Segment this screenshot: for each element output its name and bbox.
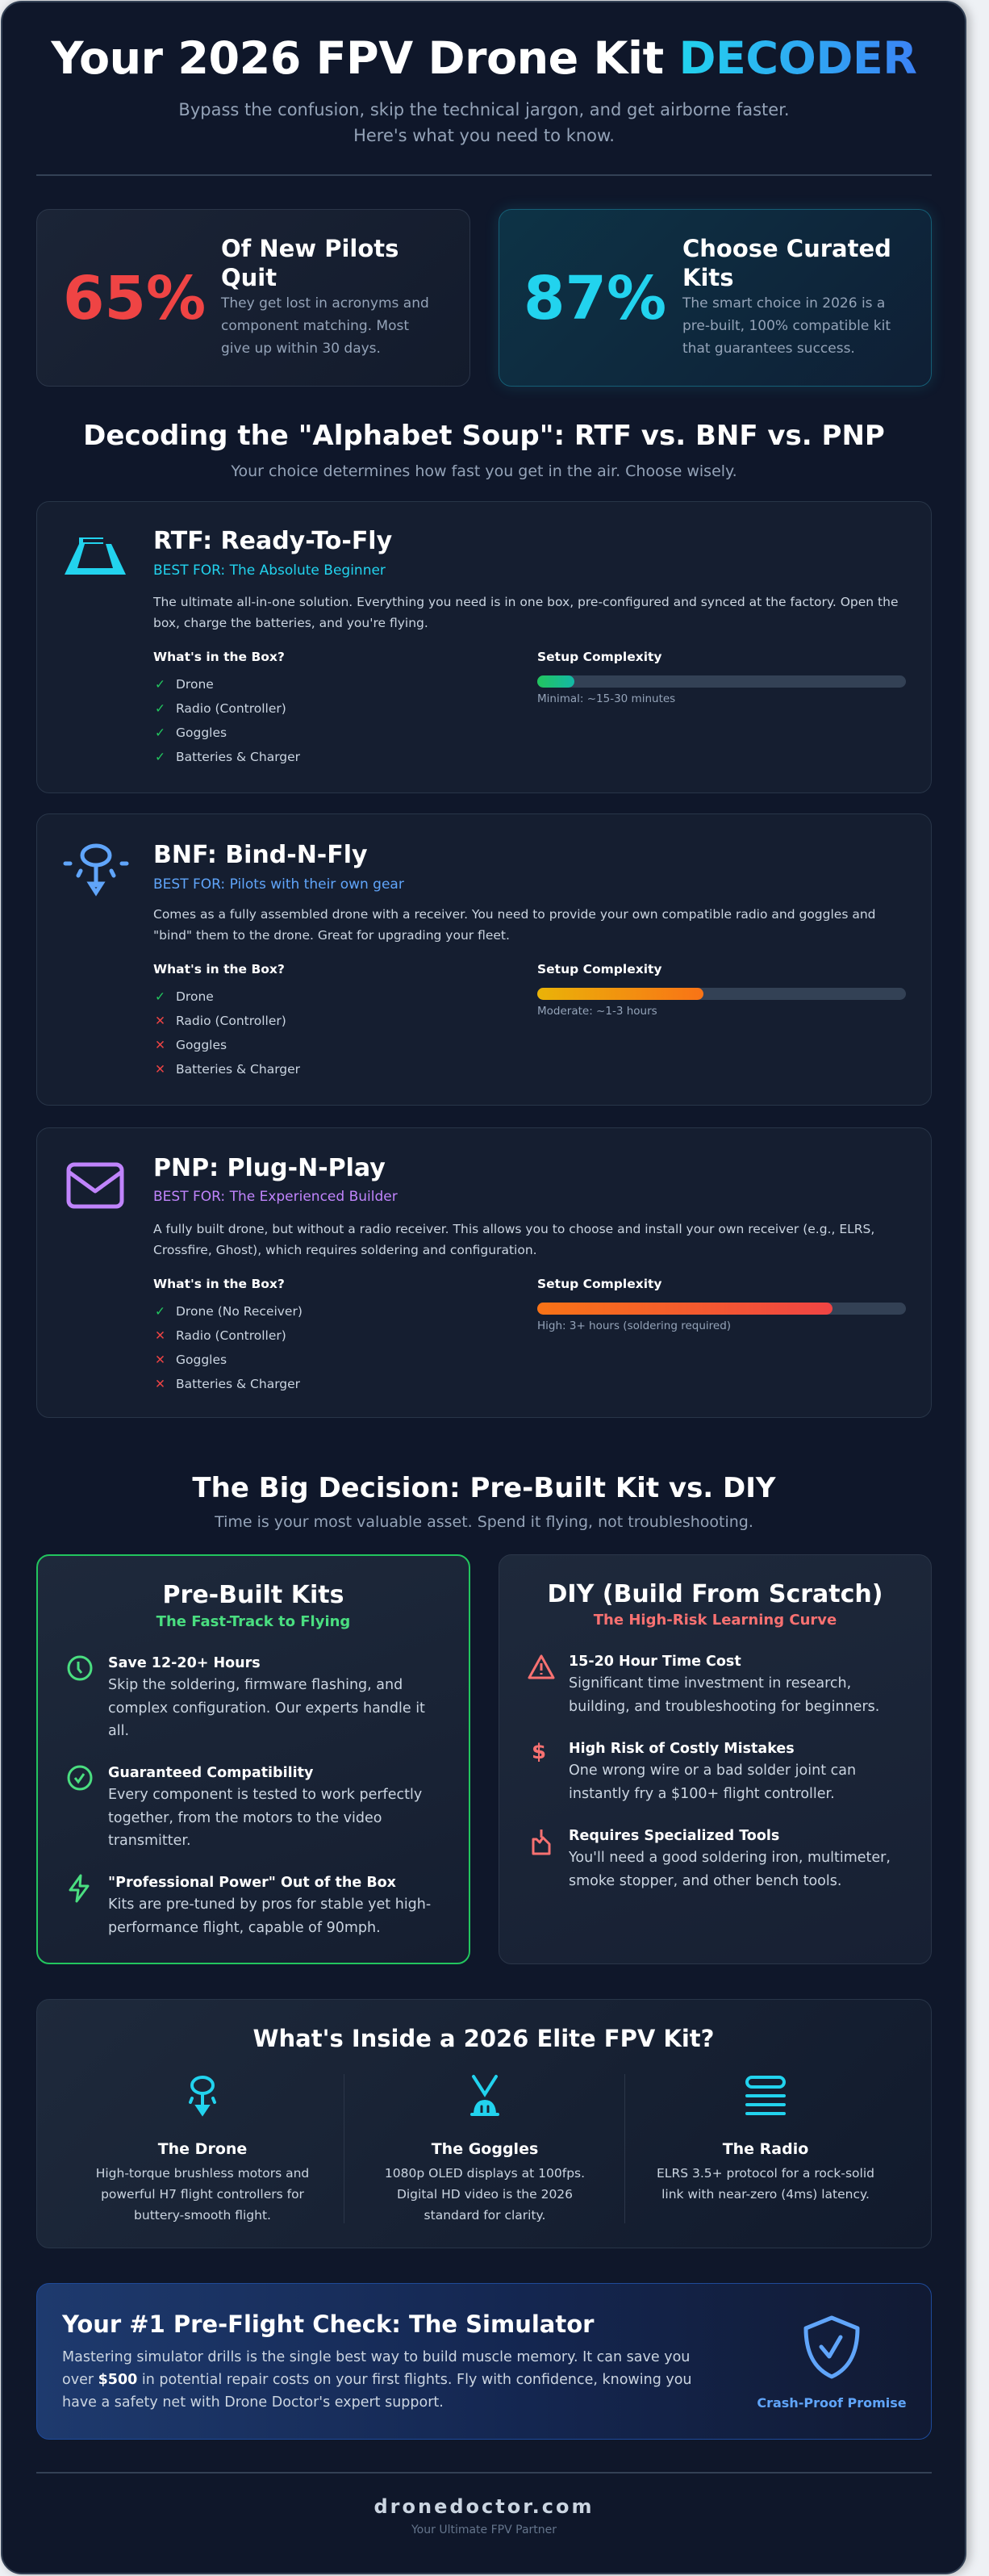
item: time cost (569, 1654, 879, 1714)
column: goggles: The Goggles (432, 2140, 538, 2158)
column: goggles: 1080p OLED displays at 100fps. Digital HD video is the 2026 standard for clarity. (385, 2166, 585, 2223)
icon: box (65, 537, 126, 575)
complexity bar (537, 988, 906, 1000)
complexity heading: Setup Complexity (537, 1277, 662, 1291)
item: time cost: Significant time investment in research, building, and troubleshooting for beginners. (569, 1675, 879, 1714)
box contents heading: What's in the Box? (153, 1277, 285, 1291)
stat text (221, 235, 429, 357)
box contents list: Radio (Controller) (176, 701, 286, 716)
panel: PNP (36, 1127, 932, 1418)
stat text: The smart choice in 2026 is a pre-built, 100% compatible kit that guarantees success. (682, 295, 891, 357)
panel subtitle: The High-Risk Learning Curve (594, 1612, 837, 1629)
panel: DIY (499, 1554, 932, 1964)
icon: drone (189, 2076, 216, 2116)
stat card: 65% (36, 209, 470, 387)
box contents list: ✓ (155, 677, 165, 692)
complexity heading: Setup Complexity (537, 650, 662, 664)
icon: drone (63, 844, 129, 896)
stat text: Choose Curated Kits (682, 235, 891, 291)
description: The ultimate all-in-one solution. Everything you need is in one box, pre-configured and synced at the factory. Open the box, charge the batteries, and you're flying. (153, 595, 898, 630)
column: radio (657, 2076, 874, 2202)
box contents list: Radio (Controller) (176, 1328, 286, 1343)
PNP title: PNP: Plug-N-Play (153, 1154, 386, 1182)
description: A fully built drone, but without a radio receiver. This allows you to choose and install your own receiver (e.g., ELRS, Crossfire, Ghost), which requires soldering and configuration. (153, 1222, 874, 1257)
box contents list: ✕ (155, 1062, 165, 1077)
footer tagline: Your Ultimate FPV Partner (411, 2524, 557, 2536)
box contents list: Goggles (176, 1038, 227, 1052)
complexity bar (537, 1303, 906, 1315)
panel: what's inside (36, 1999, 932, 2248)
icon: warning (528, 1654, 555, 1679)
best for: BEST FOR: Pilots with their own gear (153, 876, 404, 893)
item: save hours: Skip the soldering, firmware flashing, and complex configuration. Our experts handle it all. (108, 1677, 425, 1739)
item: tools (569, 1828, 891, 1888)
item: professional power: "Professional Power" Out of the Box (108, 1875, 396, 1891)
panel: RTF (36, 501, 932, 793)
stat text: Of New Pilots Quit (221, 235, 399, 291)
complexity caption: Minimal: ~15-30 minutes (537, 692, 675, 705)
subtitle (178, 100, 790, 145)
complexity caption: High: 3+ hours (soldering required) (537, 1319, 731, 1332)
RTF title: RTF: Ready-To-Fly (153, 527, 392, 555)
callout title: Your #1 Pre-Flight Check: The Simulator (62, 2310, 594, 2338)
box contents list: ✕ (155, 1014, 165, 1028)
item: professional power (108, 1875, 431, 1935)
panel subtitle: The Fast-Track to Flying (156, 1613, 350, 1630)
box contents list: ✓ (155, 750, 165, 764)
complexity heading: Setup Complexity (537, 962, 662, 976)
panel: BNF (36, 813, 932, 1106)
box contents list: Batteries & Charger (176, 1062, 300, 1077)
stat card: 87% (499, 209, 932, 387)
icon: check circle (68, 1766, 92, 1790)
section heading: big decision: The Big Decision: Pre-Built Kit vs. DIY (192, 1472, 776, 1504)
box contents list: ✕ (155, 1377, 165, 1391)
item: costly mistakes: One wrong wire or a bad solder joint can instantly fry a $100+ flight controller. (569, 1763, 856, 1801)
section subtitle: Time is your most valuable asset. Spend it flying, not troubleshooting. (215, 1513, 753, 1531)
stat text (682, 235, 891, 357)
subtitle: Here's what you need to know. (353, 126, 615, 145)
icon: goggles (470, 2074, 499, 2116)
panel title: DIY (Build From Scratch) (548, 1580, 883, 1608)
BNF title: BNF: Bind-N-Fly (153, 841, 368, 869)
item: time cost: 15-20 Hour Time Cost (569, 1654, 741, 1670)
box contents list: ✕ (155, 1038, 165, 1052)
description: Comes as a fully assembled drone with a receiver. You need to provide your own compatible radio and goggles and "bind" them to the drone. Great for upgrading your fleet. (153, 907, 876, 943)
box contents list (155, 677, 300, 764)
item: save hours: Save 12-20+ Hours (108, 1655, 261, 1671)
box contents list: Drone (No Receiver) (176, 1304, 303, 1319)
box contents list: Drone (176, 677, 214, 692)
panel: pre-built kits (36, 1554, 470, 1964)
box contents list: Batteries & Charger (176, 750, 300, 764)
item: compatibility: Every component is tested to work perfectly together, from the motors to the video transmitter. (108, 1787, 422, 1849)
box contents list: Goggles (176, 1353, 227, 1367)
stat number: 65% (63, 264, 206, 333)
title: Your 2026 FPV Drone Kit DECODER (51, 32, 917, 85)
subtitle: Bypass the confusion, skip the technical jargon, and get airborne faster. (178, 100, 790, 119)
box contents list (155, 1304, 303, 1391)
icon: lightning (69, 1874, 90, 1903)
column: goggles (385, 2074, 585, 2223)
panel: simulator callout (36, 2283, 932, 2440)
icon: money: $ (532, 1740, 546, 1764)
complexity caption: Moderate: ~1-3 hours (537, 1005, 657, 1018)
box contents list: Batteries & Charger (176, 1377, 300, 1391)
column: drone: The Drone (158, 2140, 247, 2158)
box contents list: ✕ (155, 1328, 165, 1343)
item: costly mistakes: High Risk of Costly Mistakes (569, 1741, 795, 1757)
shield label: Crash-Proof Promise (757, 2395, 907, 2411)
column: drone (96, 2076, 309, 2223)
icon: shield (803, 2316, 860, 2379)
box contents list: Goggles (176, 726, 227, 740)
box contents heading: What's in the Box? (153, 962, 285, 976)
best for: BEST FOR: The Absolute Beginner (153, 562, 386, 579)
box contents list: ✓ (155, 701, 165, 716)
item: compatibility: Guaranteed Compatibility (108, 1765, 313, 1781)
item: costly mistakes (569, 1741, 856, 1801)
box contents list: ✓ (155, 989, 165, 1004)
box contents list: ✓ (155, 726, 165, 740)
column: radio: ELRS 3.5+ protocol for a rock-solid link with near-zero (4ms) latency. (657, 2166, 874, 2202)
box contents list: Drone (176, 989, 214, 1004)
icon: envelope (66, 1162, 124, 1209)
section heading: alphabet soup: Decoding the "Alphabet Soup": RTF vs. BNF vs. PNP (83, 420, 885, 452)
icon: tool (532, 1830, 550, 1855)
box contents list: Radio (Controller) (176, 1014, 286, 1028)
box contents heading: What's in the Box? (153, 650, 285, 664)
icon: clock (68, 1656, 92, 1680)
box contents list: ✓ (155, 1304, 165, 1319)
footer brand: dronedoctor.com (374, 2495, 594, 2518)
stat number: 87% (524, 264, 666, 333)
item: tools: You'll need a good soldering iron, multimeter, smoke stopper, and other bench tools. (569, 1850, 891, 1888)
item: tools: Requires Specialized Tools (569, 1828, 779, 1844)
complexity bar (537, 675, 906, 688)
best for: BEST FOR: The Experienced Builder (153, 1189, 398, 1205)
panel title: What's Inside a 2026 Elite FPV Kit? (253, 2025, 714, 2052)
section subtitle: Your choice determines how fast you get in the air. Choose wisely. (231, 462, 737, 480)
callout body: Mastering simulator drills is the single best way to build muscle memory. It can save you over $500 in potential repair costs on your first flights. Fly with confidence, knowing you have a safety net with Drone Doctor's expert support. (62, 2349, 692, 2411)
column: drone: High-torque brushless motors and powerful H7 flight controllers for buttery-smooth flight. (96, 2166, 309, 2223)
item: professional power: Kits are pre-tuned by pros for stable yet high-performance flight, capable of 90mph. (108, 1896, 431, 1935)
column: radio: The Radio (723, 2140, 808, 2158)
box contents list (155, 989, 300, 1077)
stat text: They get lost in acronyms and component matching. Most give up within 30 days. (221, 295, 429, 357)
box contents list: ✕ (155, 1353, 165, 1367)
panel title: Pre-Built Kits (163, 1581, 344, 1609)
icon: radio (745, 2076, 786, 2115)
